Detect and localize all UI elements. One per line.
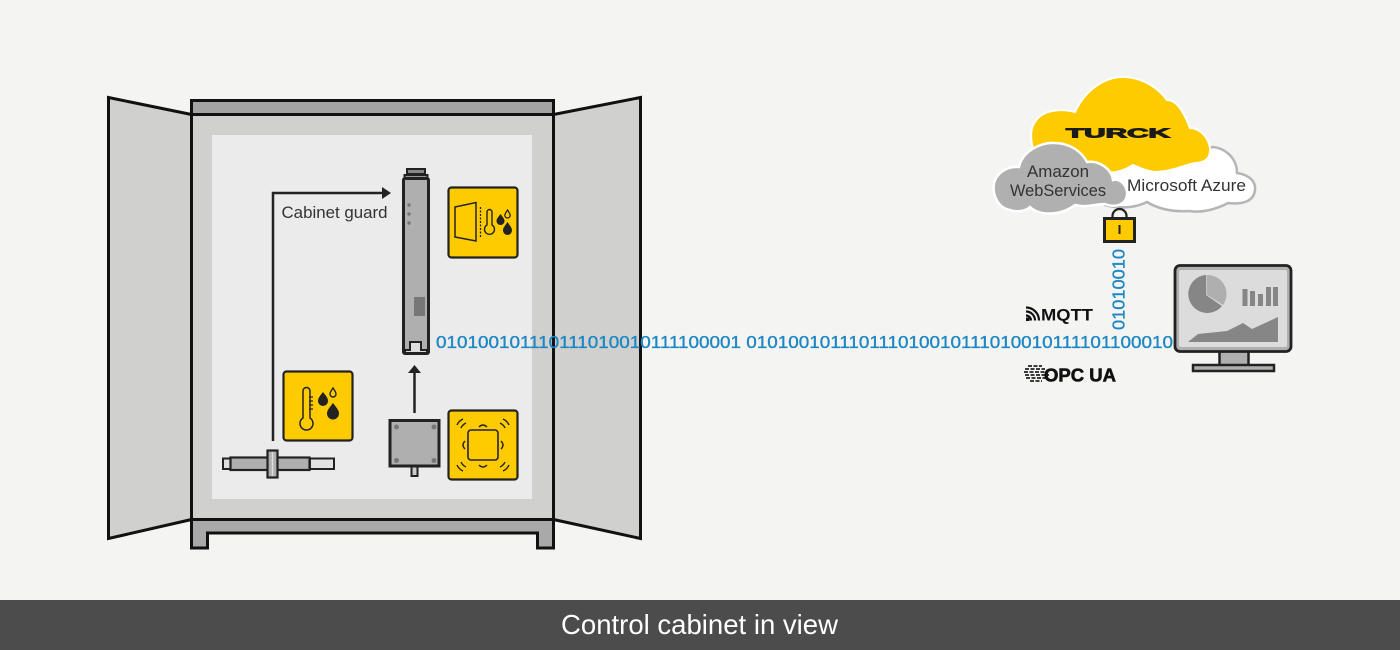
bar chart <box>1242 287 1278 306</box>
cloud: Amazon Web Services <box>994 143 1127 214</box>
temperature and humidity sensor <box>223 450 334 478</box>
cabinet top bar <box>192 100 554 114</box>
caption bar: Control cabinet in view <box>561 609 839 640</box>
monitor with dashboard <box>1175 266 1291 371</box>
cloud: Amazon Web Services: WebServices <box>1010 182 1106 200</box>
vibration sensor <box>390 420 439 476</box>
cloud: Microsoft Azure: Microsoft Azure <box>1127 177 1246 195</box>
cloud: Amazon Web Services: Amazon <box>1027 163 1089 181</box>
area chart <box>1188 317 1278 342</box>
cloud: Turck: TURCK <box>1066 126 1171 140</box>
cabinet base <box>192 520 554 548</box>
icon: cabinet temperature and humidity <box>448 188 518 258</box>
logo: OPC UA: OPC UA <box>1044 366 1116 386</box>
caption bar <box>0 600 1400 650</box>
arrow: vibration sensor up <box>408 365 421 413</box>
binary data stream vertical: 01010010 <box>1108 249 1128 330</box>
left door <box>108 98 192 538</box>
icon: temperature and humidity <box>284 372 352 440</box>
cabinet guard device <box>404 169 428 354</box>
mounting plate <box>212 135 532 499</box>
binary data stream horizontal: 010100101110111010010111100001 010100101110111010010111010010111101100010 <box>436 332 1173 352</box>
arrow: sensor to cabinet guard <box>273 187 391 441</box>
logo: MQTT: MQTT <box>1041 306 1094 324</box>
cloud: Microsoft Azure <box>1105 147 1255 212</box>
cloud: Turck <box>1031 77 1210 173</box>
clouds <box>994 77 1255 214</box>
right door <box>554 98 640 538</box>
cabinet body <box>192 114 554 520</box>
control cabinet <box>108 98 640 548</box>
label: Cabinet guard: Cabinet guard <box>282 204 388 222</box>
pie chart <box>1188 275 1227 313</box>
icon: vibration <box>448 410 518 480</box>
icon: padlock <box>1104 209 1134 242</box>
